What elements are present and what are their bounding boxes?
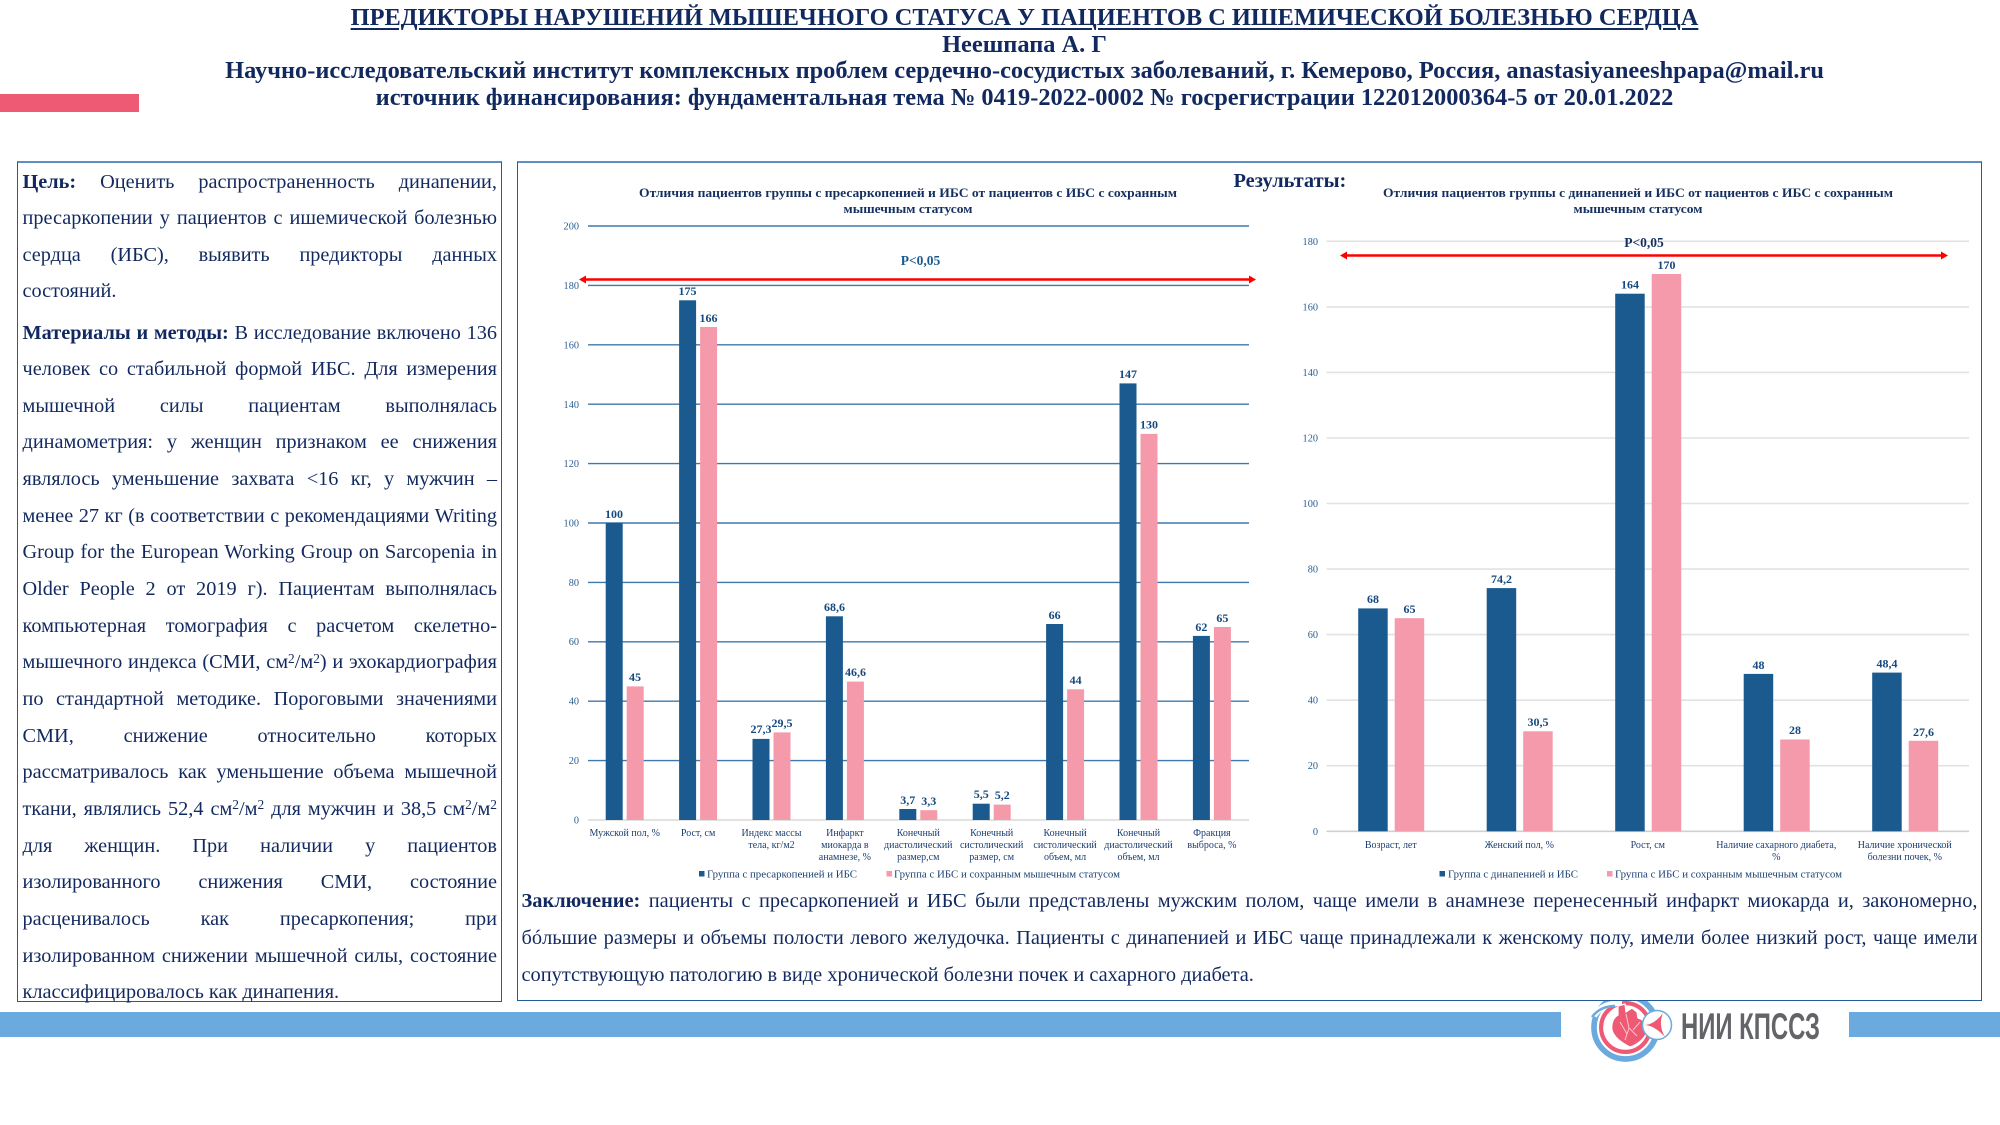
chart 1 data labels: 29,5 (772, 716, 792, 730)
text block: materials and methods: изолированного снижения СМИ, состояние (22, 871, 497, 893)
chart 1 y axis: 140 (564, 400, 579, 411)
chart 1 category labels: анамнезе, % (819, 852, 871, 863)
chart 2 data labels: 65 (1404, 602, 1416, 616)
funding source: источник финансирования: фундаментальная тема № 0419-2022-0002 № госрегистрации 122012000364-5 от 20.01.2022 (376, 84, 1673, 111)
chart 1 y axis: 200 (564, 222, 579, 232)
chart 1 title (639, 186, 1178, 216)
chart 1 category labels: тела, кг/м2 (748, 840, 795, 851)
chart 1 y axis: 100 (564, 518, 579, 530)
chart 1 data labels (605, 284, 1228, 808)
chart 1 title: Отличия пациентов группы с пресаркопенией и ИБС от пациентов с ИБС с сохранным (639, 186, 1178, 200)
chart 2 title (1383, 186, 1894, 216)
panel: aim and methods (17, 161, 502, 1002)
chart 1 category labels: Инфаркт (826, 828, 864, 839)
chart 1 data labels: 62 (1195, 620, 1207, 634)
chart 2 y axis: 160 (1303, 302, 1318, 314)
chart 2 data labels: 28 (1789, 723, 1801, 737)
footer bar left (0, 1012, 1561, 1037)
chart 2 y axis: 80 (1308, 564, 1318, 576)
text block: materials and methods: компьютерная томография с расчетом скелетно- (22, 615, 497, 637)
chart 2 data labels: 164 (1621, 278, 1639, 292)
chart 1 category labels: Рост, см (681, 828, 716, 839)
text block: materials and methods: СМИ, снижение относительно которых (22, 725, 497, 747)
chart 1 category labels: Конечный (897, 828, 941, 839)
text block: materials and methods: человек со стабильной формой ИБС. Для измерения (22, 358, 497, 380)
text block: materials and methods: ткани, являлись 52,4 см2/м2 для мужчин и 38,5 см2/м2 (22, 797, 497, 820)
chart 2 significance arrow (1340, 252, 1948, 260)
chart 2 pink bars (1395, 274, 1938, 831)
chart 1 category labels: диастолический (1104, 840, 1173, 851)
chart 2 significance label: P<0,05 (1624, 235, 1664, 250)
decorative pink bar (0, 94, 139, 112)
title: ПРЕДИКТОРЫ НАРУШЕНИЙ МЫШЕЧНОГО СТАТУСА У ПАЦИЕНТОВ С ИШЕМИЧЕСКОЙ БОЛЕЗНЬЮ СЕРДЦА (351, 4, 1698, 31)
chart 1 data labels: 66 (1049, 608, 1061, 622)
chart 1 data labels: 27,3 (750, 722, 772, 736)
chart 2 y axis: 100 (1303, 499, 1318, 510)
chart 1 y axis: 60 (569, 637, 579, 648)
chart 1 legend: Группа с ИБС и сохранным мышечным статусом (894, 870, 1121, 880)
chart 1 category labels: миокарда в (821, 840, 869, 851)
chart 1 data labels: 3,3 (921, 794, 936, 808)
chart 2 data labels: 30,5 (1528, 715, 1548, 729)
chart 2 category labels: Наличие хронической (1858, 840, 1952, 851)
chart 1 category labels: систолический (1033, 840, 1097, 851)
text block: materials and methods: для женщин. При наличии у пациентов (22, 835, 497, 857)
chart 2 data labels: 48 (1752, 658, 1764, 672)
text block: aim (22, 170, 497, 302)
chart 1 category labels: Конечный (1117, 828, 1161, 839)
author: Неешпапа А. Г (942, 31, 1107, 58)
chart 2 data labels: 27,6 (1913, 725, 1934, 739)
chart 1 category labels: объем, мл (1117, 852, 1160, 863)
chart 1 category labels: Конечный (970, 828, 1014, 839)
chart 1: presarcopenia bar chart (564, 186, 1256, 880)
chart 1 pink bars (627, 327, 1231, 820)
chart 1 category labels (589, 828, 1236, 863)
text block: materials and methods: Материалы и методы: В исследование включено 136 (22, 322, 497, 344)
text block: materials and methods: классифицировалось как динапения. (22, 981, 339, 1003)
chart 1 data labels: 147 (1119, 367, 1137, 381)
chart 2 title: мышечным статусом (1574, 202, 1703, 216)
chart 2 y axis: 180 (1303, 237, 1318, 248)
text block: materials and methods: являлось уменьшение захвата <16 кг, у мужчин – (22, 468, 497, 490)
chart 2 category labels: % (1772, 852, 1780, 863)
chart 2 y axis: 40 (1308, 696, 1318, 706)
chart 1 category labels: Индекс массы (742, 828, 802, 839)
chart 1 dark bars (606, 300, 1210, 820)
chart 1 title: мышечным статусом (844, 202, 973, 216)
text block: materials and methods: Older People 2 от 2019 г). Пациентам выполнялась (22, 578, 497, 600)
chart 2 legend: Группа с динапенией и ИБС (1448, 870, 1578, 880)
footer bar right (1849, 1012, 2000, 1037)
chart 1 data labels: 3,7 (900, 793, 915, 807)
chart 1 y axis: 20 (569, 756, 579, 767)
chart 2 y axis: 0 (1313, 827, 1318, 838)
chart 1 legend (699, 870, 1121, 880)
chart 2 y axis (1303, 237, 1318, 838)
text block: materials and methods: Group for the European Working Group on Sarcopenia in (22, 541, 497, 563)
chart 2 category labels: Рост, см (1631, 840, 1666, 851)
chart 1 category labels: Мужской пол, % (589, 828, 660, 839)
chart 2 category labels: болезни почек, % (1868, 852, 1942, 863)
chart 2 title: Отличия пациентов группы с динапенией и ИБС от пациентов с ИБС с сохранным (1383, 186, 1894, 200)
chart 2 legend (1440, 870, 1843, 880)
text block: aim: пресаркопении у пациентов с ишемической болезнью (22, 207, 497, 229)
chart 1 category labels: размер, см (969, 852, 1015, 863)
chart 2 y axis: 120 (1303, 434, 1318, 444)
text block: materials and methods: динамометрия: у женщин признаком ее снижения (22, 431, 497, 453)
text block: aim: Цель: Оценить распространенность динапении, (22, 170, 497, 192)
chart 2 category labels: Наличие сахарного диабета, (1716, 840, 1836, 851)
conclusion text: Заключение: пациенты с пресаркопенией и ИБС были представлены мужским полом, чаще имели в анамнезе перенесенный инфаркт миокарда и, закономерно, (522, 890, 1978, 912)
chart 1 y axis: 80 (569, 578, 579, 589)
chart 1 data labels: 65 (1216, 611, 1228, 625)
chart 2 legend: Группа с ИБС и сохранным мышечным статусом (1615, 870, 1843, 880)
conclusion text (522, 890, 1978, 986)
chart 1 category labels: Конечный (1044, 828, 1087, 839)
chart 2 data labels: 170 (1658, 258, 1676, 272)
chart 1 significance arrow (579, 276, 1256, 284)
chart 1 data labels: 45 (629, 670, 641, 684)
chart 2 category labels: Женский пол, % (1485, 840, 1554, 851)
conclusion text: бóльшие размеры и объемы полости левого желудочка. Пациенты с динапенией и ИБС чаще принадлежали к женскому полу, имели более низкий рост, чаще имели (522, 926, 1978, 948)
logo: НИИ КПССЗ: НИИ КПССЗ (1681, 1006, 1820, 1047)
chart 1 legend: Группа с пресаркопенией и ИБС (707, 870, 857, 880)
chart 1 category labels: систолический (960, 840, 1024, 851)
chart 1 y axis: 120 (564, 459, 579, 470)
chart 1 category labels: Фракция (1193, 828, 1231, 839)
chart 1 y axis (564, 222, 579, 826)
chart 1 category labels: объем, мл (1044, 852, 1086, 863)
affiliation: Научно-исследовательский институт комплексных проблем сердечно-сосудистых заболеваний, г. Кемерово, Россия, anastasiyaneeshpapa@mail.ru (225, 57, 1824, 84)
chart 1 data labels: 44 (1070, 673, 1082, 687)
chart 2 data labels: 48,4 (1876, 656, 1898, 670)
chart 1 significance label: P<0,05 (901, 253, 941, 268)
text block: materials and methods (22, 322, 498, 1003)
text block: materials and methods: по стандартной методике. Пороговыми значениями (22, 688, 497, 710)
chart 1 data labels: 46,6 (845, 665, 866, 679)
text block: materials and methods: мышечного индекса (СМИ, см2/м2) и эхокардиография (22, 651, 497, 673)
chart 1 data labels: 166 (700, 311, 718, 325)
chart 2 y axis: 60 (1308, 630, 1318, 641)
panel: results (517, 161, 1982, 1001)
chart 1 category labels: диастолический (884, 840, 953, 851)
text block: aim: состояний. (22, 280, 116, 302)
text block: materials and methods: менее 27 кг (в соответствии с рекомендациями Writing (22, 505, 497, 527)
chart 2: dynapenia bar chart (1303, 186, 1969, 880)
chart 1 data labels: 175 (678, 284, 696, 298)
text block: materials and methods: рассматривалось как уменьшение объема мышечной (22, 761, 497, 783)
conclusion text: сопутствующую патологию в виде хронической болезни почек и сахарного диабета. (522, 964, 1254, 986)
text block: materials and methods: изолированном снижении мышечной силы, состояние (22, 945, 497, 967)
chart 2 y axis: 20 (1308, 761, 1318, 772)
chart 2 category labels: Возраст, лет (1365, 840, 1417, 851)
chart 2 data labels: 74,2 (1491, 572, 1512, 586)
chart 2 dark bars (1358, 294, 1902, 831)
chart 1 data labels: 100 (605, 507, 623, 521)
chart 1 y axis: 0 (574, 816, 579, 826)
chart 1 data labels: 5,2 (995, 788, 1010, 802)
text block: materials and methods: расценивалось как пресаркопения; при (22, 908, 497, 930)
chart 1 y axis: 180 (564, 281, 579, 292)
chart 1 y axis: 40 (569, 696, 579, 708)
chart 2 data labels (1367, 258, 1934, 739)
chart 1 data labels: 130 (1140, 418, 1158, 432)
text block: materials and methods: мышечной силы пациентам выполнялась (22, 395, 497, 417)
chart 1 category labels: выброса, % (1187, 840, 1236, 851)
heading: results: Результаты: (1234, 170, 1346, 192)
chart 1 category labels: размер,см (897, 852, 940, 863)
chart 2 data labels: 68 (1367, 592, 1379, 606)
chart 2 category labels (1365, 840, 1952, 863)
chart 1 data labels: 68,6 (824, 600, 845, 614)
text block: aim: сердца (ИБС), выявить предикторы данных (22, 244, 497, 266)
chart 1 y axis: 160 (564, 340, 579, 352)
chart 2 y axis: 140 (1303, 368, 1318, 379)
chart 1 data labels: 5,5 (974, 787, 989, 801)
